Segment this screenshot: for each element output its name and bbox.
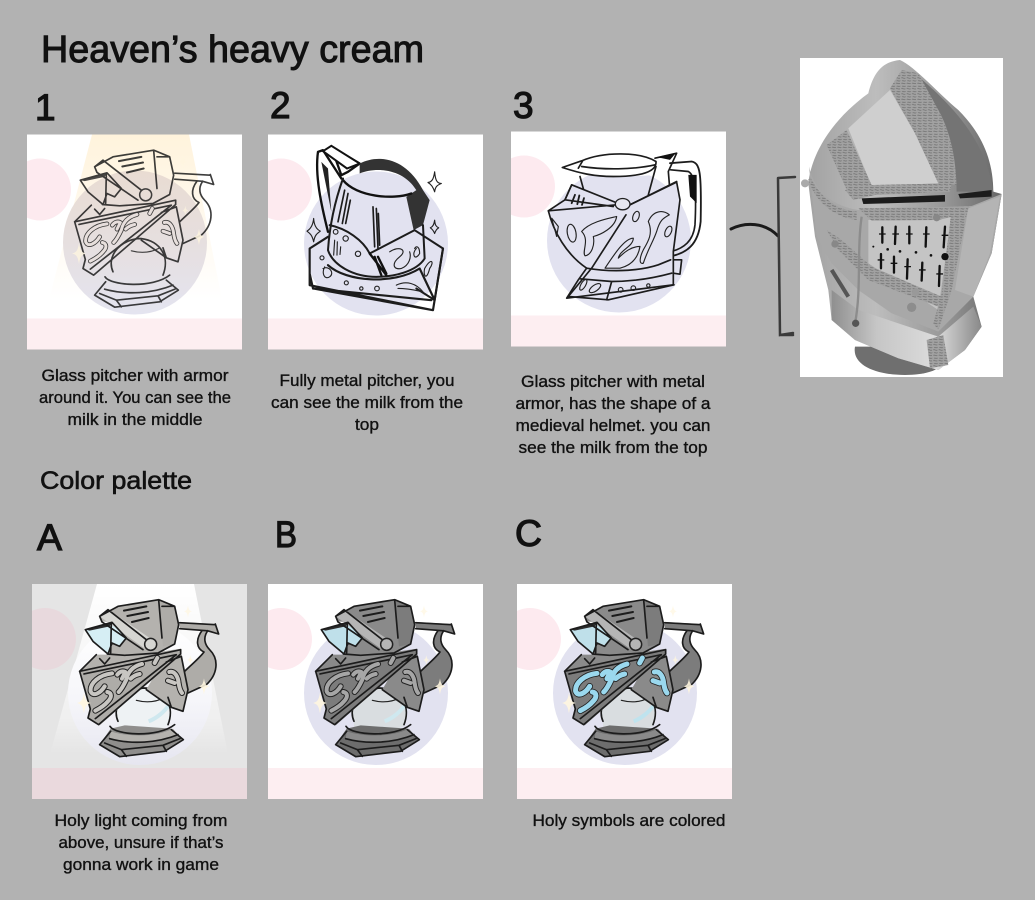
title: Heaven’s heavy cream xyxy=(41,29,424,71)
heading: option 3: 3 xyxy=(513,85,534,126)
panel: sketch 2 xyxy=(250,134,483,350)
caption: sketch 3 xyxy=(516,373,711,457)
caption: sketch 3: armor, has the shape of a xyxy=(516,395,711,413)
heading: option 2: 2 xyxy=(270,85,291,126)
panel: palette C xyxy=(499,584,732,799)
icon: steel close helmet xyxy=(801,60,1002,375)
caption: palette A: above, unsure if that’s xyxy=(58,834,224,852)
caption: sketch 2: can see the milk from the xyxy=(271,394,463,412)
caption: sketch 2: Fully metal pitcher, you xyxy=(280,372,454,390)
icon: pale metal pitcher with holy light xyxy=(77,600,219,757)
heading: color palette: Color palette xyxy=(40,467,192,495)
panel: sketch 3 xyxy=(493,132,726,346)
annotation: bracket linking sketch 3 to helmet reference xyxy=(731,177,795,335)
panel: palette B xyxy=(250,584,483,799)
caption: sketch 1: Glass pitcher with armor xyxy=(42,367,229,385)
caption: palette A: gonna work in game xyxy=(63,856,219,874)
caption: sketch 3: Glass pitcher with metal xyxy=(521,373,705,391)
caption: sketch 3: see the milk from the top xyxy=(518,439,708,457)
heading: palette B: B xyxy=(275,514,297,555)
caption: sketch 1: milk in the middle xyxy=(68,411,202,429)
panel: sketch 1 xyxy=(9,134,242,350)
caption: palette A: Holy light coming from xyxy=(54,812,228,830)
icon: line-art armored glass pitcher xyxy=(72,150,214,307)
panel: helmet reference photo xyxy=(800,58,1003,377)
icon: glass pitcher in helmet-shaped armor xyxy=(548,153,701,300)
icon: full metal pitcher line art xyxy=(307,146,443,310)
heading: option 1: 1 xyxy=(35,87,56,128)
caption: sketch 3: medieval helmet. you can xyxy=(516,417,710,435)
caption: sketch 2: top xyxy=(355,416,379,434)
panel: palette A xyxy=(14,584,247,799)
heading: palette C: C xyxy=(515,513,542,554)
caption: sketch 2 xyxy=(271,372,463,434)
caption: palette A xyxy=(54,812,228,874)
heading: palette A: A xyxy=(37,517,62,558)
icon: grey metal pitcher xyxy=(313,600,455,757)
caption: sketch 1 xyxy=(39,367,231,429)
icon: grey pitcher with blue holy symbols xyxy=(562,600,704,757)
caption: palette C: Holy symbols are colored xyxy=(532,812,726,830)
caption: sketch 1: around it. You can see the xyxy=(39,389,231,407)
